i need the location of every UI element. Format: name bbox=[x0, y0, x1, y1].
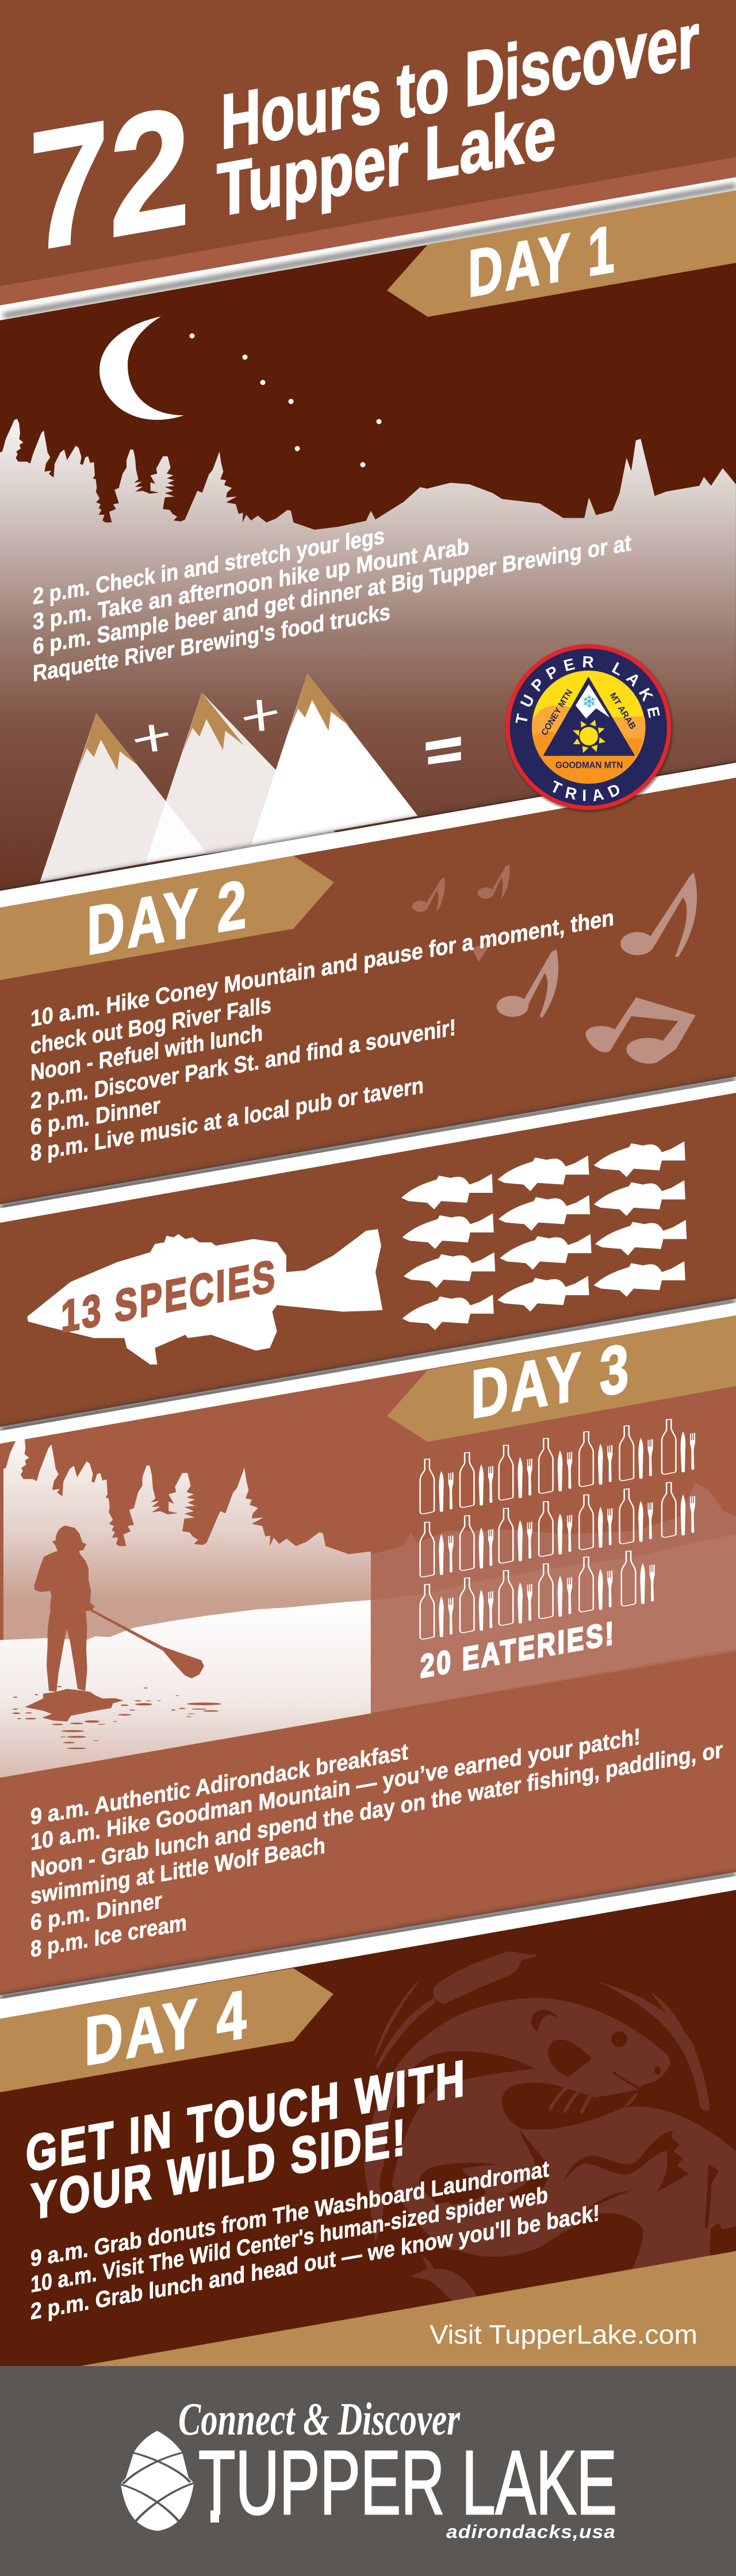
text: day 4 schedule: 10 a.m. Visit The Wild Center's human-sized spider web bbox=[30, 2182, 548, 2298]
heading: day 4: DAY 4 bbox=[85, 1976, 249, 2080]
light accent band bbox=[0, 157, 736, 305]
text: day 4 schedule: 9 a.m. Grab donuts from The Washboard Laundromat bbox=[30, 2156, 549, 2272]
panel: day 1 bbox=[0, 190, 736, 897]
text: day 3 schedule: swimming at Little Wolf Beach bbox=[30, 1832, 325, 1909]
banner: day 2 bbox=[0, 856, 334, 980]
title: Tupper Lake bbox=[217, 89, 556, 232]
person silhouette bbox=[34, 1526, 95, 1692]
text: day 3 schedule: 9 a.m. Authentic Adirondack breakfast bbox=[30, 1739, 408, 1830]
text: day 2 schedule: Noon - Refuel with lunch bbox=[30, 1020, 263, 1086]
panel: day 4 bbox=[0, 1890, 736, 2370]
icon: music notes bbox=[412, 864, 697, 1064]
location line: adirondacks,usa bbox=[446, 2521, 616, 2542]
section shadows bbox=[0, 762, 736, 2001]
badge: Tupper Lake Triad: MT ARAB bbox=[608, 691, 638, 731]
banner: day 1 bbox=[387, 190, 736, 317]
text: day 1 schedule: 2 p.m. Check in and stretch your legs bbox=[33, 523, 385, 610]
label: 13 species: 13 SPECIES bbox=[61, 1250, 277, 1342]
text: day 1 schedule: 6 p.m. Sample beer and get dinner at Big Tupper Brewing or at bbox=[33, 530, 631, 660]
icon: bottles, knives and forks (20 eateries) bbox=[420, 1419, 695, 1639]
white section dividers bbox=[0, 763, 736, 2019]
text: day 3 schedule bbox=[30, 1724, 723, 1962]
icon: three mountains with plus and equals bbox=[40, 673, 461, 882]
icon: paddle bbox=[90, 1609, 204, 1678]
tagline: Connect & Discover bbox=[178, 2394, 461, 2445]
gold footer wedge bbox=[80, 2251, 736, 2370]
title bbox=[28, 0, 699, 288]
text: day 2 schedule: 2 p.m. Discover Park St. and find a souvenir! bbox=[30, 1015, 456, 1114]
text: day 2 schedule bbox=[30, 905, 614, 1166]
night forest and gradient hillside bbox=[0, 419, 736, 890]
text: day 2 schedule: 8 p.m. Live music at a local pub or tavern bbox=[30, 1072, 424, 1166]
text: day 3 schedule: 6 p.m. Dinner bbox=[30, 1887, 162, 1936]
link text: Visit TupperLake.com bbox=[430, 2319, 697, 2349]
banner: day 4 bbox=[0, 1968, 334, 2092]
banner: day 3 bbox=[387, 1315, 736, 1442]
badge: Tupper Lake Triad: TUPPER LAKE bbox=[515, 656, 660, 723]
illustration: otter and cattails bbox=[310, 1951, 736, 2313]
heading: day 3: DAY 3 bbox=[471, 1329, 631, 1433]
text: day 3 schedule: 8 p.m. Ice cream bbox=[30, 1909, 187, 1962]
text: day 2 schedule: 10 a.m. Hike Coney Mountain and pause for a moment, then bbox=[30, 905, 614, 1032]
rock and water ripples bbox=[13, 1686, 221, 1749]
heading: wild side: GET IN TOUCH WITH bbox=[26, 2049, 467, 2183]
icon: stars bbox=[190, 334, 382, 467]
panel: day 3 bbox=[0, 1315, 736, 1995]
label: 20 eateries: 20 EATERIES! bbox=[420, 1614, 616, 1685]
heading: day 1: DAY 1 bbox=[468, 211, 617, 311]
heading: wild side: YOUR WILD SIDE! bbox=[30, 2108, 408, 2230]
badge: Tupper Lake Triad: ❄ bbox=[582, 692, 596, 713]
text: day 2 schedule: 6 p.m. Dinner bbox=[30, 1092, 160, 1140]
footer panel bbox=[0, 2366, 736, 2576]
icon: crescent moon bbox=[99, 316, 184, 420]
icon: twelve small bass bbox=[401, 1141, 687, 1330]
illustration: paddleboarder and lake bbox=[0, 1439, 371, 1778]
badge: Tupper Lake Triad: CONEY MTN bbox=[539, 688, 574, 737]
lighter hills and bottles bbox=[371, 1419, 736, 1713]
header panel bbox=[0, 0, 736, 317]
text: day 4 schedule: 2 p.m. Grab lunch and head out — we know you'll be back! bbox=[30, 2200, 600, 2325]
icon: large bass bbox=[27, 1229, 382, 1364]
badge: Tupper Lake Triad: GOODMAN MTN bbox=[555, 760, 623, 770]
panel: fish bbox=[0, 1093, 736, 1427]
badge: Tupper Lake Triad: TRIAD bbox=[553, 780, 619, 802]
title: 72 bbox=[28, 70, 190, 288]
icon: pine cone bbox=[118, 2431, 196, 2531]
text: day 1 schedule: Raquette River Brewing's food trucks bbox=[33, 599, 390, 687]
panel: day 2 bbox=[0, 778, 736, 1204]
heading: day 2: DAY 2 bbox=[87, 866, 249, 970]
text: day 3 schedule: 10 a.m. Hike Goodman Mountain — you’ve earned your patch! bbox=[30, 1724, 641, 1855]
text: day 1 schedule: 3 p.m. Take an afternoon hike up Mount Arab bbox=[33, 533, 469, 635]
badge: Tupper Lake Triad bbox=[505, 644, 674, 813]
text: day 2 schedule: check out Bog River Falls bbox=[30, 992, 271, 1059]
